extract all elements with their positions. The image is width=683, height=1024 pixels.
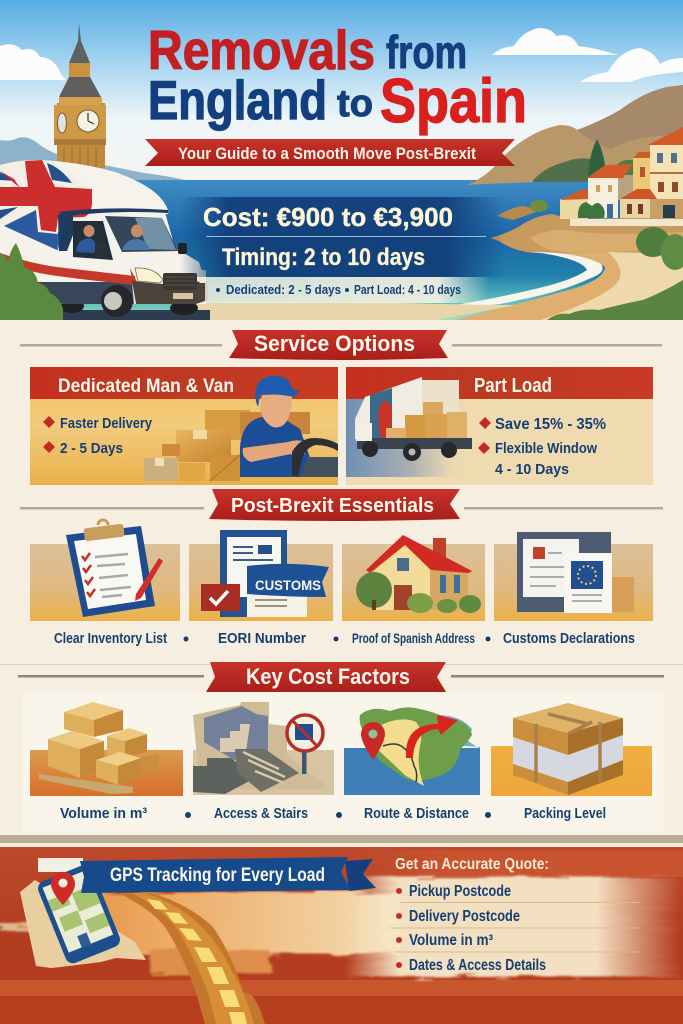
icon: customs documents: CUSTOMS <box>255 577 321 593</box>
card: eori number <box>189 530 333 621</box>
roof <box>40 160 168 215</box>
GPS ribbon: GPS Tracking for Every Load <box>110 865 325 886</box>
panel: dedicated man and van <box>30 367 338 485</box>
clouds <box>0 28 683 82</box>
illustration: boxes <box>144 410 310 481</box>
right hills <box>467 85 683 185</box>
brushed streaks <box>0 877 680 977</box>
hero scene <box>0 0 683 320</box>
bushes <box>547 227 683 320</box>
phone with GPS map <box>20 858 146 968</box>
labels: cost factors: Route & Distance <box>364 805 469 822</box>
labels: essentials: Proof of Spanish Address <box>352 630 475 646</box>
card: packing <box>491 703 652 796</box>
feature list: 2 - 5 Days <box>60 440 123 457</box>
title <box>148 19 527 136</box>
Big Ben <box>54 23 106 168</box>
feature list: 4 - 10 Days <box>495 461 569 478</box>
card: route map <box>344 707 480 795</box>
quote checklist: Dates & Access Details <box>409 957 546 974</box>
sand foreground <box>196 302 516 320</box>
icon: clipboard <box>66 520 163 617</box>
title: England <box>148 69 327 131</box>
cypress tree <box>588 139 606 177</box>
cost and timing banner: Part Load: 4 - 10 days <box>354 283 461 297</box>
icon: declaration documents with EU flag <box>517 532 634 613</box>
heading: post-brexit essentials <box>20 489 663 521</box>
surf <box>449 252 603 306</box>
feature list: Save 15% - 35% <box>495 416 606 433</box>
body <box>0 210 206 304</box>
footer panel <box>0 847 683 1024</box>
heading: post-brexit essentials: Post-Brexit Essentials <box>231 495 434 517</box>
heading: key cost factors: Key Cost Factors <box>246 664 410 689</box>
quote checklist: Volume in m³ <box>409 932 493 949</box>
coastal rocks <box>490 214 683 253</box>
icon: house <box>356 535 481 613</box>
door frame dark <box>58 213 73 251</box>
labels: cost factors: Access & Stairs <box>214 805 308 822</box>
van <box>0 160 208 317</box>
card: stairs <box>193 702 334 795</box>
feature list <box>478 416 606 478</box>
icon: customs documents <box>201 530 329 617</box>
beach <box>455 252 683 320</box>
heading: key cost factors <box>0 662 683 693</box>
panel: dedicated man and van: Dedicated Man & Van <box>58 376 234 397</box>
labels: essentials: EORI Number <box>218 630 306 647</box>
card: customs declarations <box>494 532 653 621</box>
illustration: driver <box>240 376 338 477</box>
front wheel <box>101 285 133 317</box>
panel: part load: Part Load <box>474 375 552 397</box>
front bumper <box>132 281 208 304</box>
card: clear inventory list <box>30 520 180 621</box>
left mountain <box>0 137 194 182</box>
labels: essentials: Clear Inventory List <box>54 631 167 647</box>
cost and timing banner: Timing: 2 to 10 days <box>222 244 425 271</box>
cream body <box>0 320 683 847</box>
stripe <box>0 253 135 285</box>
labels: cost factors: Packing Level <box>524 805 606 822</box>
flag <box>0 160 93 250</box>
cost and timing banner: Cost: €900 to €3,900 <box>203 202 453 232</box>
GPS ribbon <box>80 857 376 893</box>
card: volume <box>30 702 183 796</box>
section divider band <box>0 835 683 843</box>
quote checklist: Delivery Postcode <box>409 908 520 925</box>
cost and timing banner: Dedicated: 2 - 5 days <box>226 282 341 297</box>
subtitle ribbon: Your Guide to a Smooth Move Post-Brexit <box>178 144 476 163</box>
headlight <box>135 268 163 283</box>
sea <box>0 180 683 320</box>
heading: service options <box>20 330 662 360</box>
title: to <box>337 83 373 125</box>
labels: cost factors: Volume in m³ <box>60 805 147 822</box>
title: Spain <box>380 67 527 136</box>
feature list: Flexible Window <box>495 440 597 457</box>
card: proof of spanish address <box>342 535 485 621</box>
panel: cost factors <box>23 692 664 832</box>
feature list: Faster Delivery <box>60 415 153 432</box>
quote heading: Get an Accurate Quote: <box>395 856 549 873</box>
title: Removals <box>148 19 375 81</box>
far wheels <box>170 301 198 315</box>
feature list <box>43 415 153 457</box>
panel: part load <box>346 367 653 485</box>
labels: cost factors <box>60 805 606 822</box>
labels: essentials <box>54 630 635 647</box>
illustration: truck with boxes <box>355 377 472 461</box>
road <box>40 310 210 320</box>
title: from <box>386 26 467 78</box>
heading: service options: Service Options <box>254 331 415 356</box>
quote checklist: Pickup Postcode <box>409 883 511 900</box>
windshield <box>105 216 178 252</box>
quote checklist <box>390 883 640 974</box>
subtitle ribbon <box>145 139 515 166</box>
door window <box>73 221 113 260</box>
foreground tree <box>0 243 63 320</box>
cost and timing banner <box>180 197 505 303</box>
houses <box>560 127 683 226</box>
road <box>118 893 265 1024</box>
lower skirt <box>0 282 134 304</box>
labels: essentials: Customs Declarations <box>503 631 635 647</box>
